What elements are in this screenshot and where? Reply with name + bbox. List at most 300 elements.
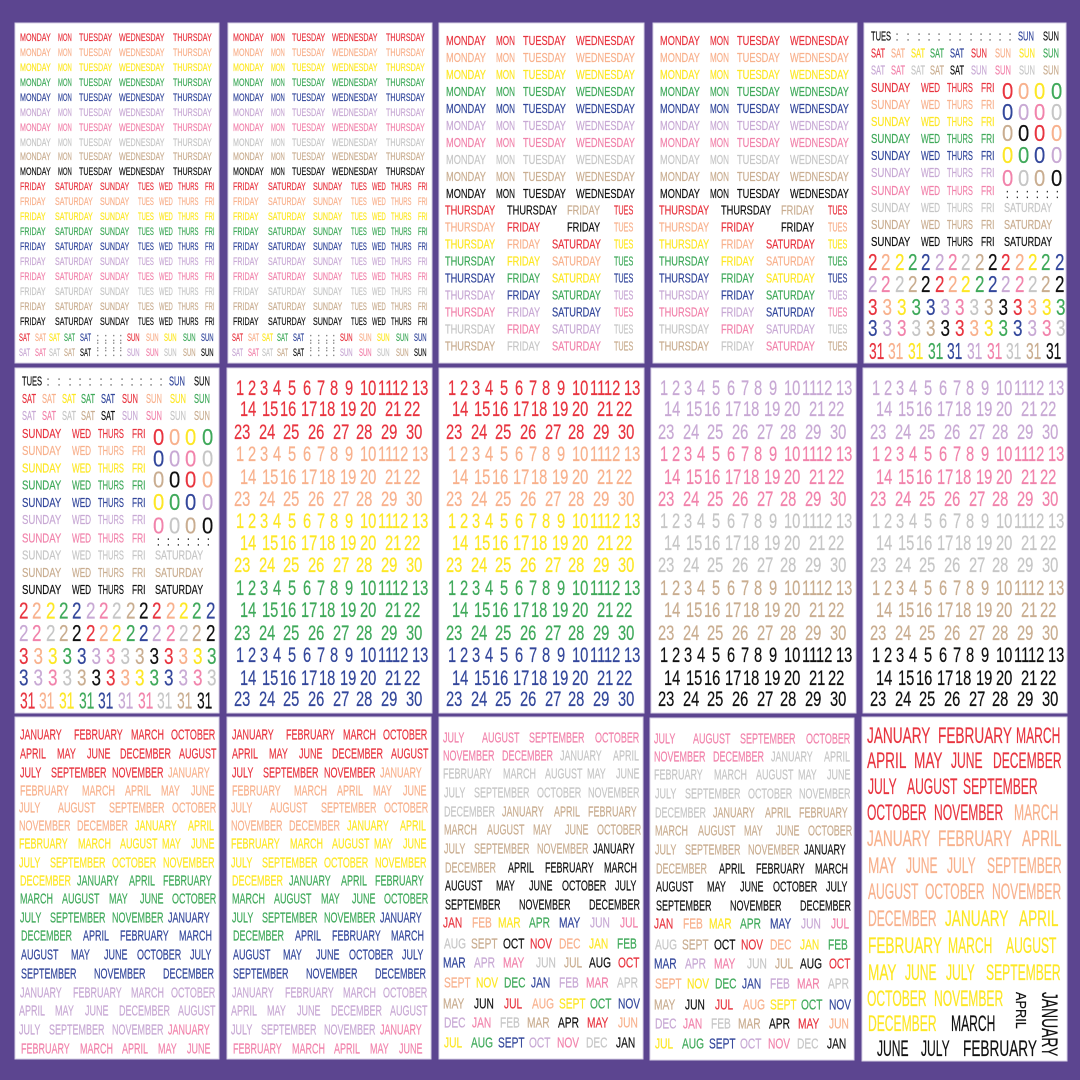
month name rows <box>443 729 641 913</box>
weekday rows: Monday to Thursday: TUESDAY <box>292 137 325 148</box>
digits 2, 3 and 31 rows: 3 <box>135 645 144 670</box>
Thursday to Tues rows: SATURDAY <box>552 289 602 303</box>
SAT and SUN small stickers with colons: SAT <box>35 331 47 343</box>
yellow numbers: 5 <box>288 509 296 533</box>
top rows: TUES, colons, SAT and SUN: : <box>949 29 951 44</box>
weekday rows: Monday to Thursday: TUESDAY <box>79 32 112 43</box>
lilac numbers: 9 <box>769 376 777 400</box>
Sunday, Wed, Thurs, Fri rows: THURS <box>98 583 124 598</box>
month name rows: NOVEMBER <box>163 854 215 871</box>
Sunday, Wed, Thurs, Fri rows: WED <box>72 549 91 563</box>
Monday to Wednesday rows: MON <box>710 136 729 151</box>
peach numbers: 19 <box>552 465 568 489</box>
short month rows: SEPT <box>770 995 797 1013</box>
panel: date numbers muted colours sheet 1 <box>651 368 856 713</box>
top rows: TUES, colons, SAT and SUN: : <box>79 375 81 389</box>
Monday to Wednesday rows: TUESDAY <box>523 120 567 133</box>
month name rows <box>231 726 429 1057</box>
green numbers: 9 <box>345 576 353 600</box>
weekday rows: Monday to Thursday: MON <box>271 61 285 73</box>
tan numbers: 28 <box>992 621 1008 645</box>
peach numbers: 15 <box>262 465 278 489</box>
short month rows: OCT <box>590 994 612 1012</box>
green numbers: 23 <box>446 621 462 645</box>
month name rows: AUGUST <box>698 822 736 839</box>
black numbers: 13 <box>836 643 852 667</box>
month name rows: NOVEMBER <box>748 841 800 858</box>
red numbers: 20 <box>360 397 376 421</box>
Thursday to Tues rows: FRIDAY <box>567 204 601 218</box>
digits 2, 3 and 31 rows: 2 <box>192 599 201 624</box>
month name rows: APRIL <box>337 782 363 799</box>
pink numbers: 29 <box>805 487 821 511</box>
Monday to Wednesday rows: MONDAY <box>446 69 486 82</box>
SAT and SUN small stickers with colons: : <box>105 339 107 351</box>
month name rows: DECEMBER <box>289 817 340 834</box>
yellow numbers: 13 <box>412 509 428 533</box>
navy numbers: 21 <box>385 666 401 690</box>
red numbers: 10 <box>360 376 376 400</box>
weekday rows: Monday to Thursday: MON <box>271 106 285 118</box>
lilac numbers: 11 <box>802 376 817 400</box>
short month rows: DEC <box>586 1033 608 1051</box>
green numbers: 11 <box>378 576 393 600</box>
black numbers: 27 <box>757 687 773 711</box>
Monday to Wednesday rows: MONDAY <box>660 154 700 167</box>
zero digit grid: 0 <box>185 466 196 493</box>
yellow numbers: 19 <box>340 531 356 555</box>
top rows: TUES, colons, SAT and SUN: : <box>918 29 920 44</box>
digits 2, 3 and 31 rows: 2 <box>948 273 957 298</box>
yellow numbers: 26 <box>308 553 324 577</box>
black numbers: 25 <box>707 687 723 711</box>
month name rows: MARCH <box>391 927 424 944</box>
month name rows: OCTOBER <box>384 890 428 907</box>
gray numbers: 12 <box>816 509 832 533</box>
short month rows: OCT <box>618 953 640 971</box>
month name rows: OCTOBER <box>595 729 639 746</box>
navy numbers: 9 <box>557 643 565 667</box>
month name rows: AUGUST <box>120 835 158 852</box>
yellow numbers: 1 <box>448 509 456 533</box>
digits 2, 3 and 31 rows: 31 <box>908 340 923 365</box>
Sunday, Wed, Thurs, Fri rows: FRI <box>981 149 994 164</box>
weekday rows: Monday to Thursday: TUESDAY <box>292 62 325 73</box>
digits 2, 3 and 31 rows: 31 <box>177 689 192 715</box>
month name rows: JANUARY <box>232 726 274 743</box>
zero digit grid: 0 <box>1051 165 1062 191</box>
large month rows: AUGUST <box>907 774 958 799</box>
SAT and SUN small stickers with colons: : <box>326 331 328 343</box>
Thursday to Tues rows: THURSDAY <box>659 340 710 354</box>
weekday rows: Monday to Thursday <box>233 31 425 177</box>
Sunday, Wed, Thurs, Fri rows: WED <box>72 496 91 511</box>
lilac numbers: 19 <box>976 397 992 421</box>
large month rows: AUGUST <box>868 879 919 904</box>
short month rows: OCT <box>714 935 736 953</box>
top rows: TUES, colons, SAT and SUN: SAT <box>101 392 115 407</box>
weekday rows: Monday to Thursday: MONDAY <box>233 47 264 58</box>
weekday rows: Friday to Fri: WED <box>159 240 173 252</box>
month name rows: MAY <box>744 822 763 839</box>
top rows: TUES, colons, SAT and SUN: SAT <box>930 63 944 78</box>
short month rows: MAR <box>654 954 677 972</box>
month name rows: FEBRUARY <box>20 782 69 799</box>
digits 2, 3 and 31 rows: 2 <box>206 599 215 624</box>
month name rows: FEBRUARY <box>443 765 492 782</box>
yellow numbers: 3 <box>260 509 268 533</box>
digits 2, 3 and 31 rows: 3 <box>999 317 1008 342</box>
Monday to Wednesday rows: MON <box>710 34 729 49</box>
weekday rows: Monday to Thursday: WEDNESDAY <box>332 32 378 43</box>
Thursday to Tues rows: FRIDAY <box>721 323 755 337</box>
lilac numbers: 21 <box>809 397 825 421</box>
month name rows: JANUARY <box>289 872 331 889</box>
weekday rows: Friday to Fri: WED <box>372 300 386 312</box>
month name rows: OCTOBER <box>748 785 792 802</box>
black numbers: 3 <box>896 643 904 667</box>
weekday rows: Monday to Thursday: THURSDAY <box>173 47 212 58</box>
Monday to Wednesday rows: MONDAY <box>660 137 700 150</box>
Monday to Wednesday rows: MON <box>710 68 729 83</box>
gray numbers: 4 <box>697 509 705 533</box>
weekday rows: Friday to Fri: FRIDAY <box>20 271 46 282</box>
short month rows: SEPT <box>559 994 586 1012</box>
short month rows: JUN <box>685 995 705 1013</box>
pink numbers: 17 <box>725 465 741 489</box>
month name rows: FEBRUARY <box>799 804 848 821</box>
weekday rows: Friday to Fri: TUES <box>138 180 154 192</box>
top rows: TUES, colons, SAT and SUN: : <box>160 375 162 389</box>
top rows: TUES, colons, SAT and SUN <box>871 29 1059 78</box>
zero digit grid: 0 <box>169 445 180 472</box>
red numbers: 4 <box>485 376 493 400</box>
large month rows: MARCH <box>1016 723 1060 748</box>
Sunday, Wed, Thurs, Fri rows: WED <box>72 532 91 546</box>
digits 2, 3 and 31 rows: 2 <box>192 621 201 646</box>
black numbers: 23 <box>870 687 886 711</box>
month name rows: MAY <box>798 766 817 783</box>
navy numbers: 26 <box>520 687 536 711</box>
digits 2, 3 and 31 rows: 2 <box>895 273 904 298</box>
Monday to Wednesday rows: MON <box>496 153 515 168</box>
tan numbers: 20 <box>784 598 800 622</box>
zero digit grid: 0 <box>1051 78 1062 104</box>
weekday rows: Friday to Fri: THURS <box>178 270 199 282</box>
lilac numbers: 17 <box>725 397 741 421</box>
green numbers: 27 <box>545 621 561 645</box>
weekday rows: Friday to Fri: FRI <box>418 255 428 267</box>
month name rows: SEPTEMBER <box>109 799 165 816</box>
short month rows: JUN <box>747 954 767 972</box>
Sunday, Wed, Thurs, Fri rows: SUNDAY <box>22 479 62 493</box>
Monday to Wednesday rows: MONDAY <box>660 171 700 184</box>
digits 2, 3 and 31 rows: 2 <box>112 599 121 624</box>
red numbers: 16 <box>280 397 296 421</box>
large month rows: OCTOBER <box>867 800 927 825</box>
gray numbers: 16 <box>704 531 720 555</box>
month name rows: OCTOBER <box>773 878 817 895</box>
month name rows: OCTOBER <box>537 784 581 801</box>
Sunday, Wed, Thurs, Fri rows: WED <box>72 479 91 493</box>
weekday rows: Monday to Thursday: MONDAY <box>20 137 51 148</box>
weekday rows: Friday to Fri: TUES <box>138 270 154 282</box>
month name rows: AUGUST <box>270 799 308 816</box>
weekday rows: Friday to Fri: SATURDAY <box>268 211 306 222</box>
top rows: TUES, colons, SAT and SUN: SAT <box>871 46 885 61</box>
month name rows: NOVEMBER <box>112 764 164 781</box>
weekday rows: Monday to Thursday: THURSDAY <box>173 92 212 103</box>
top rows: TUES, colons, SAT and SUN: SAT <box>62 392 76 407</box>
tan numbers: 6 <box>727 576 735 600</box>
month name rows: NOVEMBER <box>537 840 589 857</box>
top rows: TUES, colons, SAT and SUN: SUN <box>971 46 987 61</box>
weekday rows: Friday to Fri: FRI <box>418 315 428 327</box>
colon row: : <box>1036 188 1039 201</box>
yellow numbers: 10 <box>360 509 376 533</box>
month name rows: JANUARY <box>380 909 422 926</box>
gray numbers: 9 <box>981 509 989 533</box>
Sunday, Wed, Thurs, Fri rows: WED <box>921 132 940 147</box>
large month rows: SEPTEMBER <box>986 960 1061 985</box>
red numbers: 8 <box>542 376 550 400</box>
weekday rows: Friday to Fri: FRIDAY <box>20 196 46 207</box>
weekday rows: Friday to Fri: SATURDAY <box>55 301 93 312</box>
SAT and SUN small stickers with colons: : <box>326 339 328 351</box>
month name rows: JUNE <box>403 835 426 852</box>
short month rows: SEPT <box>498 1033 525 1051</box>
digits 2, 3 and 31 rows: 2 <box>881 273 890 298</box>
Sunday, Wed, Thurs, Fri rows: SUNDAY <box>871 133 911 146</box>
Sunday, Wed, Thurs, Fri rows: SUNDAY <box>22 584 62 598</box>
green numbers: 17 <box>301 598 317 622</box>
month name rows: DECEMBER <box>445 859 496 876</box>
peach numbers: 2 <box>248 442 256 466</box>
top rows: TUES, colons, SAT and SUN: SAT <box>22 409 36 424</box>
vertical APRIL sticker: APRIL <box>1013 992 1030 1029</box>
month name rows: JULY <box>615 877 636 894</box>
weekday rows: Friday to Fri <box>20 180 215 327</box>
digits 2, 3 and 31 rows: 3 <box>164 666 173 691</box>
peach numbers: 20 <box>360 465 376 489</box>
panel: date numbers bright colours sheet 2 <box>439 368 644 713</box>
large month rows: JANUARY <box>867 723 930 748</box>
month name rows: JANUARY <box>77 872 119 889</box>
month name rows: AUGUST <box>178 1002 216 1019</box>
gray numbers: 26 <box>944 553 960 577</box>
peach numbers: 13 <box>412 442 428 466</box>
top rows: TUES, colons, SAT and SUN: SAT <box>42 392 56 407</box>
black numbers: 19 <box>764 666 780 690</box>
month name rows: JUNE <box>403 782 426 799</box>
month name rows: AUGUST <box>656 878 694 895</box>
tan numbers: 27 <box>757 621 773 645</box>
peach numbers: 10 <box>360 442 376 466</box>
large month rows: DECEMBER <box>868 1011 937 1036</box>
weekday rows: Friday to Fri: WED <box>372 240 386 252</box>
digits 2, 3 and 31 rows: 2 <box>126 621 135 646</box>
month name rows: SEPTEMBER <box>262 854 318 871</box>
month name rows: APRIL <box>824 748 850 765</box>
zero digit grid: 0 <box>153 489 164 515</box>
top rows: TUES, colons, SAT and SUN: SUN <box>194 409 210 424</box>
yellow numbers: 7 <box>317 509 325 533</box>
weekday rows: Monday to Thursday: TUESDAY <box>292 32 325 43</box>
green numbers: 19 <box>552 598 568 622</box>
weekday rows: Monday to Thursday: WEDNESDAY <box>119 32 165 43</box>
green numbers: 5 <box>288 576 296 600</box>
weekday rows: Friday to Fri: FRIDAY <box>233 211 259 222</box>
weekday rows: Friday to Fri: SUNDAY <box>313 181 342 192</box>
gray numbers: 12 <box>1028 509 1044 533</box>
zero digit grid: 0 <box>202 466 213 493</box>
weekday rows: Friday to Fri: TUES <box>351 195 367 207</box>
weekday rows: Friday to Fri: SATURDAY <box>55 226 93 237</box>
tan numbers: 12 <box>1028 576 1044 600</box>
digits 2, 3 and 31 rows: 3 <box>77 666 86 691</box>
short month rows: JUN <box>618 1013 638 1031</box>
Thursday to Tues rows: THURSDAY <box>445 340 496 354</box>
tan numbers: 3 <box>896 576 904 600</box>
gray numbers: 29 <box>805 553 821 577</box>
Thursday to Tues rows: TUES <box>828 222 847 235</box>
weekday rows: Friday to Fri: WED <box>159 270 173 282</box>
pink numbers: 8 <box>754 442 762 466</box>
month name rows: SEPTEMBER <box>321 799 377 816</box>
peach numbers: 11 <box>590 442 605 466</box>
Thursday to Tues rows <box>659 204 847 354</box>
month name rows: APRIL <box>231 1002 257 1019</box>
Thursday to Tues rows: SATURDAY <box>552 238 602 252</box>
Sunday, Wed, Thurs, Fri rows: SUNDAY <box>22 462 62 476</box>
yellow numbers: 19 <box>552 531 568 555</box>
large month rows <box>867 723 1062 1061</box>
weekday rows: Monday to Thursday: TUESDAY <box>79 122 112 133</box>
green numbers: 8 <box>542 576 550 600</box>
month name rows: APRIL <box>19 1002 45 1019</box>
top rows: TUES, colons, SAT and SUN: : <box>970 29 972 44</box>
Monday to Wednesday rows: TUESDAY <box>737 120 781 133</box>
yellow numbers: 20 <box>572 531 588 555</box>
black numbers: 9 <box>981 643 989 667</box>
peach numbers: 10 <box>572 442 588 466</box>
navy numbers: 3 <box>472 643 480 667</box>
digits 2, 3 and 31 rows: 3 <box>106 645 115 670</box>
large month rows: NOVEMBER <box>934 800 1003 825</box>
weekday rows: Monday to Thursday: WEDNESDAY <box>119 107 165 118</box>
Monday to Wednesday rows: WEDNESDAY <box>576 171 635 184</box>
Sunday, Wed, Thurs, Fri rows: FRI <box>132 444 145 459</box>
gray numbers: 23 <box>870 553 886 577</box>
yellow numbers: 27 <box>333 553 349 577</box>
colon row: : <box>1026 188 1029 201</box>
weekday rows: Friday to Fri: SATURDAY <box>268 316 306 327</box>
top rows: TUES, colons, SAT and SUN: : <box>121 375 123 389</box>
tan numbers: 16 <box>916 598 932 622</box>
large month rows: OCTOBER <box>925 879 985 904</box>
month name rows: DECEMBER <box>375 965 426 982</box>
Sunday, Wed, Thurs, Fri rows: SATURDAY <box>1004 202 1053 215</box>
month name rows: NOVEMBER <box>306 965 358 982</box>
SAT and SUN small stickers with colons: SUN <box>377 346 390 358</box>
month name rows: DECEMBER <box>331 1002 382 1019</box>
green numbers: 23 <box>234 621 250 645</box>
Sunday, Wed, Thurs, Fri rows: SATURDAY <box>155 549 204 563</box>
peach numbers: 12 <box>604 442 620 466</box>
navy numbers: 24 <box>259 687 275 711</box>
month name rows: JUNE <box>104 946 127 963</box>
digits 2, 3 and 31 rows: 2 <box>988 273 997 298</box>
tan numbers: 15 <box>686 598 702 622</box>
lilac numbers: 9 <box>981 376 989 400</box>
gray numbers: 2 <box>884 509 892 533</box>
Thursday to Tues rows: SATURDAY <box>552 340 602 354</box>
Sunday, Wed, Thurs, Fri rows <box>22 427 204 598</box>
digits 2, 3 and 31 rows: 3 <box>121 666 130 691</box>
gray numbers: 25 <box>707 553 723 577</box>
green numbers: 9 <box>557 576 565 600</box>
digits 2, 3 and 31 rows: 3 <box>1042 296 1051 321</box>
yellow numbers: 5 <box>500 509 508 533</box>
month name rows: MAY <box>161 782 180 799</box>
pink numbers: 13 <box>836 442 852 466</box>
month name rows: FEBRUARY <box>233 1040 282 1057</box>
top rows: TUES, colons, SAT and SUN: SUN <box>194 392 210 407</box>
digits 2, 3 and 31 rows: 2 <box>32 599 41 624</box>
Sunday, Wed, Thurs, Fri rows: SUNDAY <box>22 428 62 441</box>
Thursday to Tues rows: THURSDAY <box>445 221 496 235</box>
month name rows: AUGUST <box>332 835 370 852</box>
Thursday to Tues rows: SATURDAY <box>552 272 602 286</box>
digits 2, 3 and 31 rows: 2 <box>179 621 188 646</box>
digits 2, 3 and 31 rows: 3 <box>912 317 921 342</box>
month name rows: DECEMBER <box>800 897 851 914</box>
weekday rows: Friday to Fri: TUES <box>138 315 154 327</box>
month name rows: SEPTEMBER <box>445 896 501 913</box>
weekday rows: Monday to Thursday: MONDAY <box>233 151 264 162</box>
weekday rows: Friday to Fri: SUNDAY <box>313 226 342 237</box>
month name rows: JUNE <box>140 890 163 907</box>
red numbers: 28 <box>568 420 584 444</box>
green numbers: 7 <box>529 576 537 600</box>
short month rows: JAN <box>443 913 462 931</box>
digits 2, 3 and 31 rows: 2 <box>948 251 957 276</box>
pink numbers: 7 <box>741 442 749 466</box>
tan numbers: 25 <box>707 621 723 645</box>
pink numbers: 12 <box>1028 442 1044 466</box>
Monday to Wednesday rows: WEDNESDAY <box>790 171 849 184</box>
month name rows: DECEMBER <box>163 965 214 982</box>
tan numbers: 17 <box>725 598 741 622</box>
month name rows: MAY <box>269 745 288 762</box>
Monday to Wednesday rows: WEDNESDAY <box>576 120 635 133</box>
month name rows: DECEMBER <box>656 860 707 877</box>
peach numbers: 15 <box>474 465 490 489</box>
Thursday to Tues rows: TUES <box>614 324 633 337</box>
month name rows: JANUARY <box>804 841 846 858</box>
red numbers: 23 <box>234 420 250 444</box>
weekday rows: Monday to Thursday: TUESDAY <box>292 107 325 118</box>
digits 2, 3 and 31 rows: 3 <box>135 666 144 691</box>
SAT and SUN small stickers with colons: SUN <box>396 346 409 358</box>
short month rows: AUG <box>589 953 611 971</box>
lilac numbers: 22 <box>828 397 844 421</box>
large month rows: JULY <box>946 960 975 985</box>
panel: large month stickers <box>862 717 1067 1061</box>
weekday rows: Friday to Fri: SATURDAY <box>55 316 93 327</box>
panel: mixed weekend and digit stickers sheet 1 <box>864 23 1066 365</box>
weekday rows: Friday to Fri: SATURDAY <box>55 211 93 222</box>
